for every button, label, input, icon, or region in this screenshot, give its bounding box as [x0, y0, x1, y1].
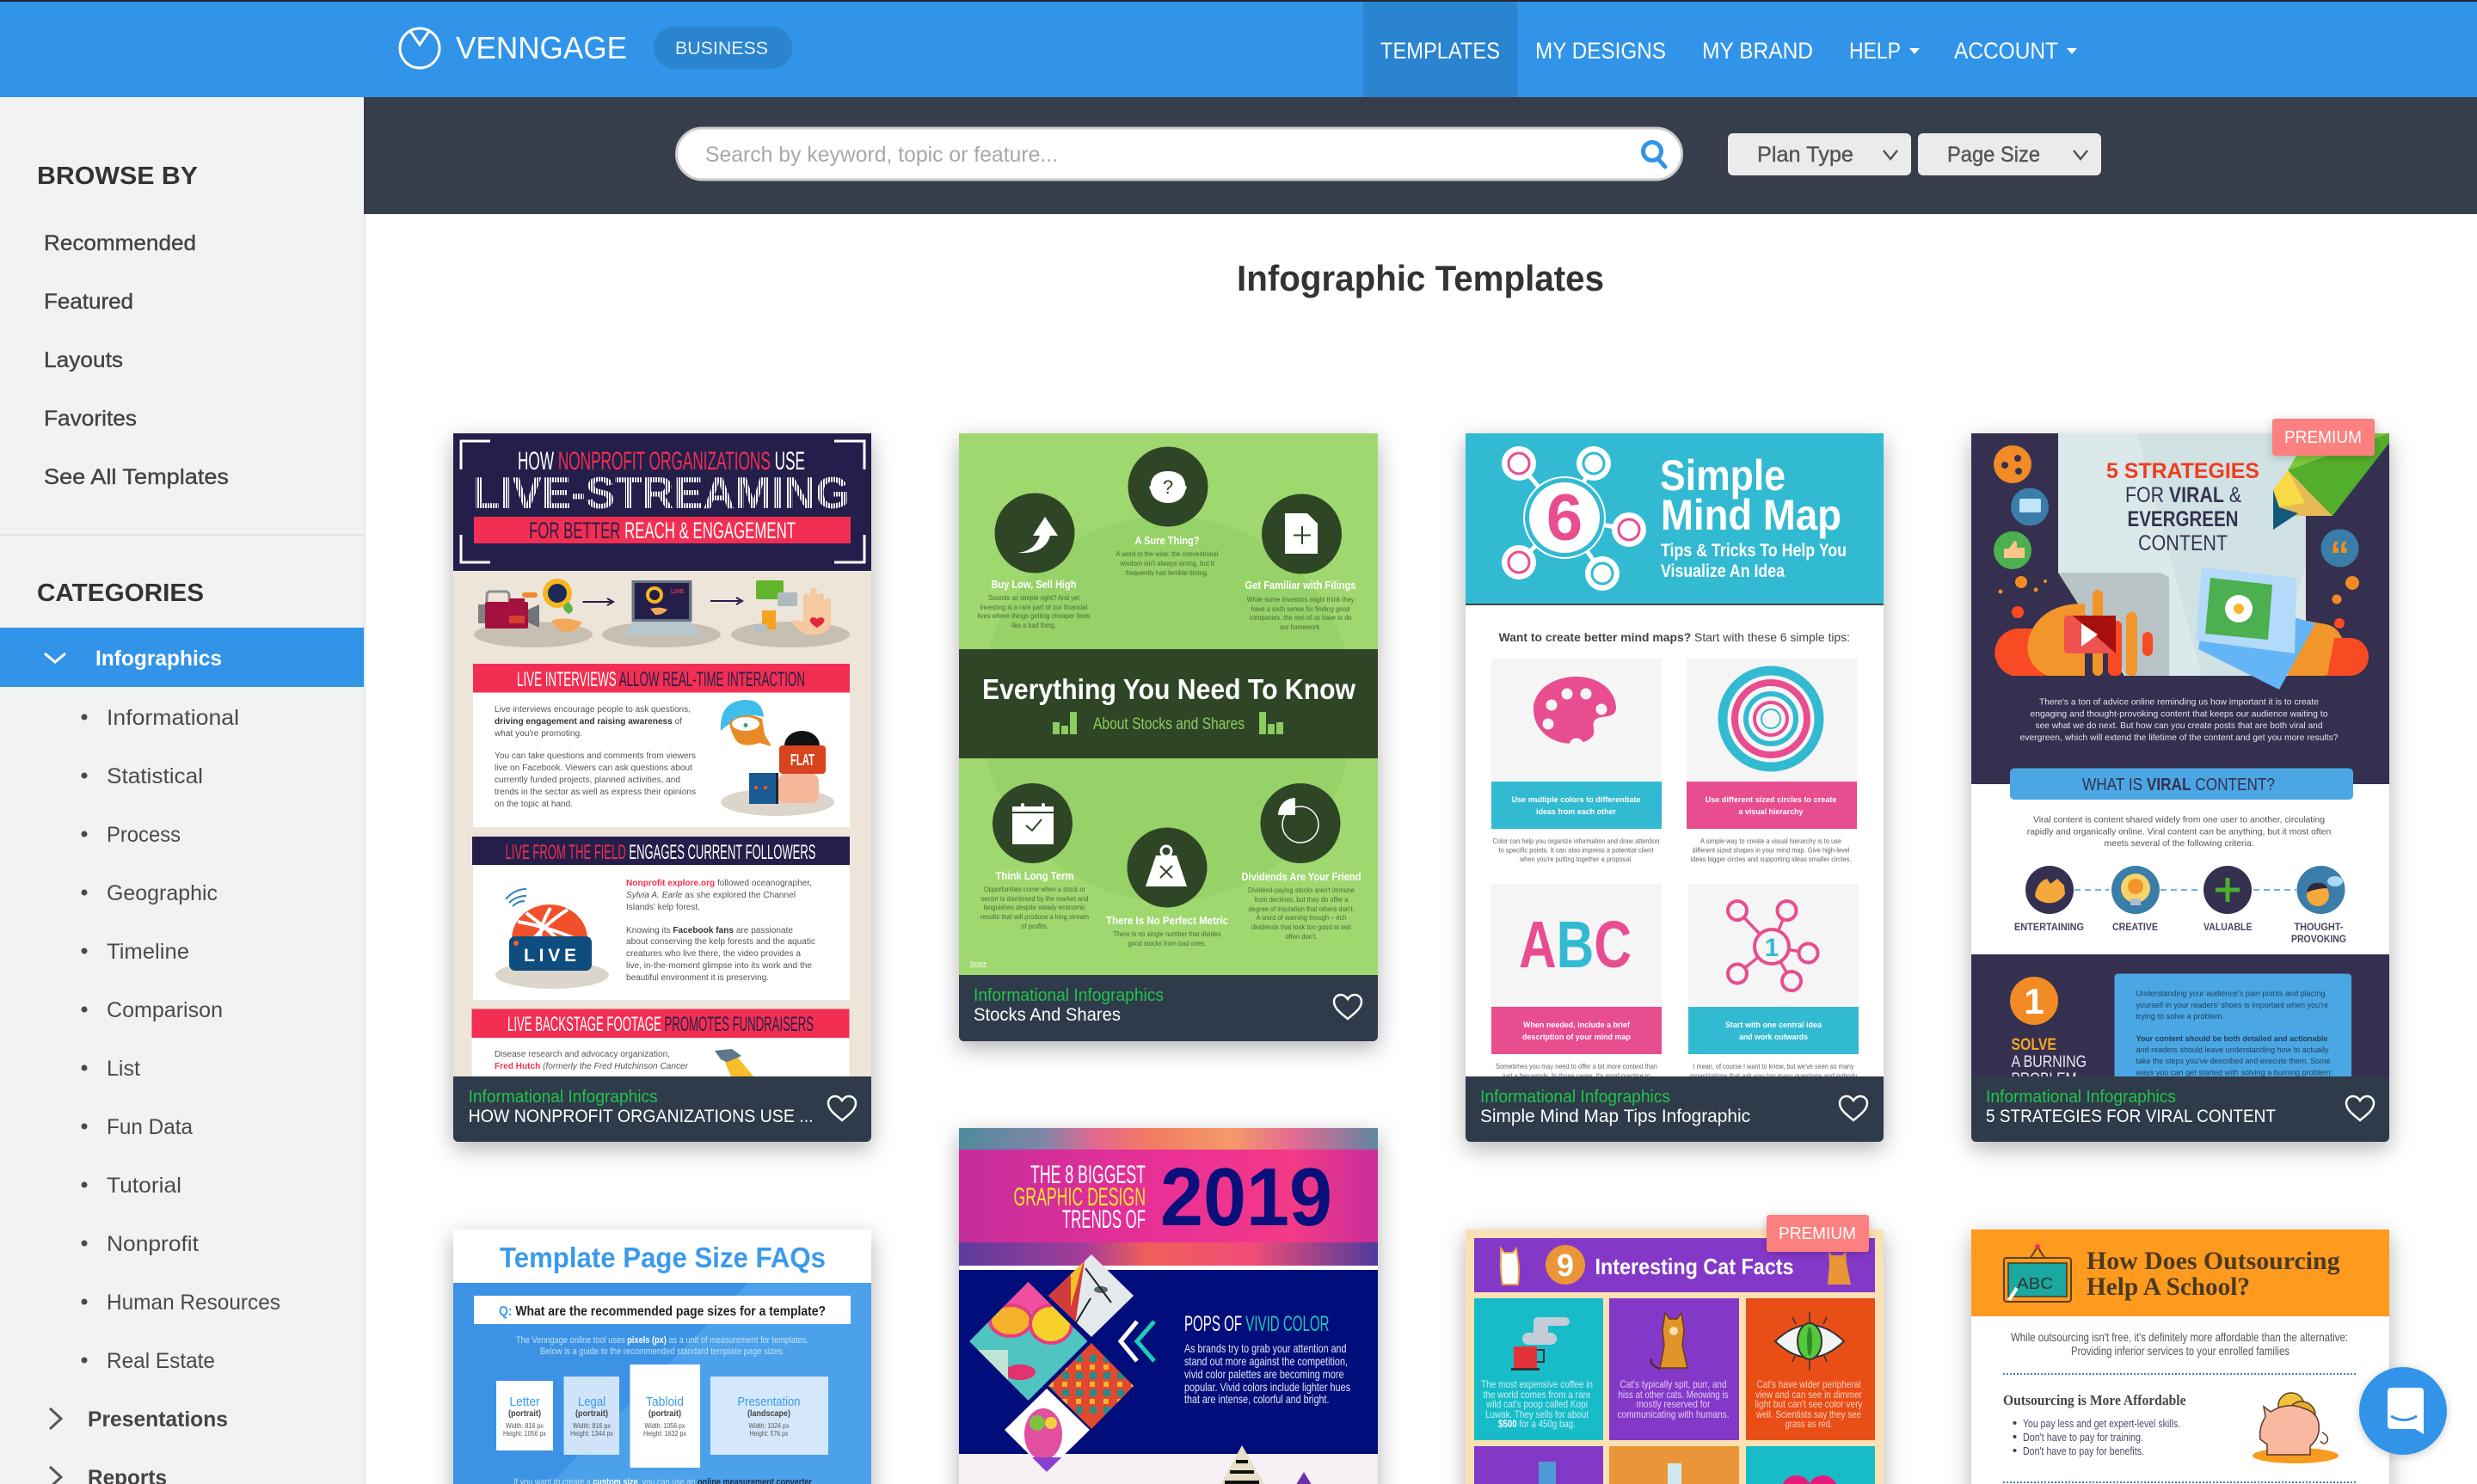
section: what is viral content: meets several of the following criteria:	[2104, 838, 2253, 849]
tip: central idea	[1688, 884, 1859, 1080]
card: simple mind map	[1466, 433, 1884, 1142]
subcategory list: Geographic	[107, 881, 218, 905]
subcategory list: Informational	[107, 706, 239, 730]
body text: creatures who live there, the video provides a	[626, 949, 801, 959]
item: a sure thing	[1116, 447, 1219, 577]
item: think long term: results that will produce a long stream	[980, 912, 1089, 921]
section: what is viral content: WHAT IS VIRAL CONTENT?	[2082, 776, 2275, 794]
footer: Stocks And Shares	[974, 1005, 1121, 1025]
pops of vivid color text: popular. Vivid colors include lighter hues	[1184, 1380, 1350, 1394]
tip: circle sizes: different sized shapes in your mind map. Give high-level	[1693, 846, 1850, 855]
tip: central idea: organizations that ask way too many questions and nobody	[1689, 1071, 1858, 1080]
browse by menu: Favorites	[44, 407, 137, 431]
tip: central idea: Start with one central idea	[1725, 1021, 1822, 1030]
body text: Nonprofit explore.org followed oceanographer,	[626, 879, 812, 888]
section: solve a burning problem: trying to solve a problem.	[2136, 1012, 2224, 1021]
item: no perfect metric	[1106, 827, 1228, 947]
item: get familiar with filings: our homework.	[1280, 622, 1321, 631]
tip: circle sizes: a visual hierarchy	[1739, 807, 1804, 817]
search band	[364, 97, 2477, 214]
fact: cat sounds: hiss at other cats. Meowing is	[1619, 1389, 1729, 1401]
header block: Mind Map	[1661, 491, 1841, 539]
intro paragraph: see what we do next. But how can you create posts that are both viral and	[2035, 721, 2323, 731]
tip: colors	[1491, 659, 1662, 863]
intro paragraph: engaging and thought-provoking content that keeps our audience waiting to	[2030, 708, 2328, 719]
header	[1971, 1230, 2389, 1316]
dropdown: plan type: Plan Type	[1757, 143, 1853, 167]
tip: colors: when you're putting together a proposal.	[1519, 855, 1632, 863]
sidebar	[0, 97, 366, 1484]
tip: circle sizes: ideas bigger circles and supporting ideas smaller circles.	[1691, 855, 1851, 863]
badge: premium: PREMIUM	[1779, 1224, 1856, 1243]
item: dividends: A word of warning though – rich	[1256, 913, 1347, 922]
section: solve a burning problem: yourself in your readers' shoes is important when you're	[2136, 1001, 2328, 1010]
item: buy low sell high: Buy Low, Sell High	[991, 578, 1077, 591]
tip: central idea: I mean, of course I want to know, but we've seen so many	[1693, 1062, 1854, 1070]
tip: central idea: and work outwards	[1739, 1033, 1808, 1042]
pops of vivid color text: stand out more against the competition,	[1184, 1354, 1348, 1368]
body text: beautiful environment it is preserving.	[626, 973, 769, 983]
header block: LIVE-STREAMING	[473, 469, 850, 518]
item: no perfect metric: There Is No Perfect Metric	[1106, 914, 1228, 927]
section: live backstage footage	[471, 1009, 850, 1081]
item: think long term: Opportunities come when a stock or	[984, 885, 1085, 893]
card: 5 strategies viral content	[1971, 419, 2389, 1142]
diamond: sunglasses mural	[969, 1282, 1088, 1401]
tip: colors: ideas from each other	[1536, 807, 1616, 817]
dropdown: page size	[1918, 133, 2101, 175]
icon: chalkboard: ABC	[2017, 1275, 2053, 1292]
item: dividends: dividends that look too good to last	[1251, 923, 1352, 931]
nav links: MY BRAND	[1702, 38, 1813, 64]
header: How Does Outsourcing	[2087, 1247, 2339, 1275]
tip: colors: Use multiple colors to differentiate	[1512, 795, 1641, 805]
header	[1474, 1238, 1875, 1292]
subcategory list: Fun Data	[107, 1115, 193, 1139]
title: Infographic Templates	[1237, 258, 1604, 298]
badge: premium	[1767, 1215, 1869, 1252]
icon: chalkboard	[2004, 1244, 2071, 1302]
subcategory list: Statistical	[107, 764, 203, 788]
illustration: camera to viewer flow: LIVE	[671, 589, 685, 595]
illustration: camera to viewer flow	[474, 579, 850, 647]
section: solve a burning problem: Understanding your audience's pain points and placing	[2136, 989, 2326, 999]
diamond: colorful cat	[1005, 1389, 1090, 1472]
header block: FOR BETTER REACH & ENGAGEMENT	[529, 518, 796, 543]
item: dividends: from declines, but they do offer a	[1254, 895, 1349, 904]
fact: cat eyes: view and can see in dimmer	[1755, 1389, 1862, 1401]
item: a sure thing: frequently has terrible timing.	[1126, 568, 1208, 577]
intro text	[516, 1335, 808, 1357]
item: think long term: Think Long Term	[996, 869, 1073, 882]
hero background shape	[2058, 433, 2306, 676]
illustration: interview microphone: FLAT	[790, 751, 814, 769]
footer: Informational Infographics	[974, 986, 1164, 1005]
social icons	[1994, 445, 2358, 578]
criteria labels: VALUABLE	[2203, 921, 2252, 933]
item: get familiar with filings: Get Familiar with Filings	[1245, 579, 1355, 592]
body text: about conserving the kelp forests and the aquatic	[626, 937, 815, 947]
browse by menu	[44, 231, 229, 489]
footer: 5 STRATEGIES FOR VIRAL CONTENT	[1986, 1107, 2276, 1126]
intro text: Providing inferior services to your enrolled families	[2071, 1344, 2290, 1358]
active category: infographics: Infographics	[95, 647, 222, 671]
size: presentation: Width: 1024 px	[748, 1421, 790, 1430]
section: solve a burning problem: and readers should leave understanding how to actually	[2136, 1046, 2329, 1055]
badge: premium	[2272, 419, 2375, 456]
section: live interviews	[473, 664, 850, 827]
icon: pencil	[2273, 426, 2389, 530]
size: presentation: (landscape)	[747, 1409, 790, 1419]
header block: HOW NONPROFIT ORGANIZATIONS USE	[518, 447, 805, 475]
fact: cat eyes: light but can't see color very	[1755, 1398, 1863, 1410]
body text: on the topic at hand.	[495, 800, 573, 809]
subcategory list: Comparison	[107, 998, 223, 1022]
body text: Islands' kelp forest.	[626, 903, 700, 912]
illustration: live globe	[495, 889, 609, 989]
size: legal: Width: 816 px	[573, 1421, 612, 1430]
section: live from the field	[472, 837, 850, 1000]
browse by menu: Layouts	[44, 348, 123, 372]
fact: coffee: wild cat's poop called Kopi	[1485, 1398, 1588, 1410]
section: solve a burning problem: Your content should be both detailed and actionable	[2136, 1034, 2327, 1044]
icon: mind map six	[1502, 446, 1646, 591]
badge: business	[654, 27, 792, 69]
header block: Visualize An Idea	[1661, 561, 1785, 581]
item: think long term: of profits.	[1021, 922, 1048, 930]
social icons: “	[2330, 533, 2350, 578]
card: outsourcing school	[1971, 1230, 2389, 1484]
lower triangles	[1208, 1445, 1313, 1484]
subcategory list	[81, 706, 280, 1373]
item: get familiar with filings: companies, the rest of us have to do	[1249, 613, 1352, 622]
tip: colors: Color can help you organize information and draw attention	[1493, 837, 1660, 845]
header banner: TRENDS OF	[1062, 1205, 1146, 1234]
section: more affordable: You pay less and get expert-level skills.	[2023, 1417, 2180, 1430]
icon: mind map six: 6	[1546, 481, 1583, 555]
header banner: 2019	[1160, 1151, 1332, 1243]
section: more affordable: Don't have to pay for benefits.	[2023, 1444, 2144, 1457]
header block	[453, 433, 871, 571]
size: presentation	[710, 1377, 828, 1455]
dropdown: page size: Page Size	[1947, 143, 2040, 167]
diamond: triangle pattern	[1048, 1343, 1134, 1429]
footer	[453, 1076, 871, 1142]
intro paragraph: There's a ton of advice online reminding us how important it is to create	[2039, 696, 2319, 707]
fact: coffee: The most expensive coffee in	[1481, 1378, 1593, 1390]
item: a sure thing: A word to the wise: the conventional	[1116, 549, 1219, 558]
section: solve a burning problem	[2010, 973, 2351, 1088]
footer	[959, 975, 1378, 1041]
tip: colors: to specific points. It can also impress a potential client	[1498, 846, 1654, 855]
size: letter: Width: 816 px	[506, 1421, 544, 1430]
criteria labels	[2014, 921, 2346, 945]
header block: Simple	[1660, 451, 1786, 500]
item: dividends: Dividends Are Your Friend	[1242, 870, 1361, 883]
fact: cat sounds	[1609, 1298, 1739, 1440]
body text: live on Facebook. Viewers can ask questions about	[495, 763, 692, 773]
item: buy low sell high	[977, 494, 1091, 629]
subcategory list: Timeline	[107, 940, 189, 964]
illustration: interview microphone	[721, 700, 834, 816]
card: cat facts	[1466, 1215, 1884, 1484]
body text: Live interviews encourage people to ask questions,	[495, 705, 691, 714]
heading: browse by: BROWSE BY	[37, 163, 198, 190]
intro paragraph	[2019, 696, 2339, 743]
search box: Search by keyword, topic or feature...	[705, 143, 1058, 167]
footer	[1971, 1076, 2389, 1142]
size: letter: (portrait)	[508, 1409, 541, 1419]
collapsed categories	[50, 1407, 228, 1484]
item: a sure thing: ?	[1163, 476, 1173, 498]
tip: abc descriptions: When needed, include a brief	[1523, 1021, 1631, 1030]
chat bubble button	[2359, 1367, 2447, 1455]
card: nonprofit live-streaming	[453, 433, 871, 1142]
body text: currently funded projects, planned activities, and	[495, 776, 680, 785]
size: letter: Height: 1056 px	[503, 1429, 547, 1438]
header block	[1466, 433, 1884, 605]
source link: Source	[970, 961, 986, 967]
section: live backstage footage: Fred Hutch (formerly the Fred Hutchinson Cancer	[495, 1062, 689, 1071]
section: solve a burning problem: take the steps you've described and execute them. Some	[2136, 1057, 2331, 1066]
header banner: THE 8 BIGGEST	[1030, 1161, 1146, 1189]
item: a sure thing: wisdom isn't always wrong, but it	[1120, 559, 1214, 567]
fact: coffee: the world comes from a rare	[1483, 1389, 1591, 1401]
title text: 5 STRATEGIES	[2106, 459, 2259, 483]
tip: abc descriptions: just a few words. In those cases, it's good practice to	[1502, 1071, 1650, 1080]
title text: CONTENT	[2138, 531, 2228, 555]
tip: circle sizes: A simple way to create a visual hierarchy is to use	[1700, 837, 1841, 845]
item: dividends: often don't.	[1285, 932, 1318, 941]
item: buy low sell high: investing is a rare part of our financial	[980, 603, 1088, 611]
tip: abc descriptions: Sometimes you may need to offer a bit more context than	[1496, 1062, 1657, 1070]
body text: driving engagement and raising awareness of	[495, 717, 682, 727]
criteria icons	[2025, 866, 2345, 914]
item: no perfect metric: good stocks from bad ones.	[1128, 939, 1206, 947]
size: tabloid: (portrait)	[648, 1409, 681, 1419]
title text: FOR VIRAL &	[2125, 483, 2241, 507]
fact: cat eyes: grass as red.	[1786, 1418, 1832, 1430]
section: what is viral content: rapidly and organically online. Viral content can be anything, but it most often	[2027, 827, 2331, 837]
intro text: Below is a guide to the recommended standard template page sizes.	[540, 1346, 784, 1357]
size: legal: Height: 1344 px	[570, 1429, 614, 1438]
fact: cat sounds: mostly reserved for	[1636, 1398, 1711, 1410]
body text: trends in the sector as well as express their opinions	[495, 788, 696, 797]
fact: cat eyes	[1746, 1298, 1875, 1440]
pops of vivid color text: that are intense, colorful and bright.	[1184, 1392, 1330, 1406]
body text: live, in-the-moment glimpse into its work and the	[626, 961, 812, 971]
intro text: The Venngage online tool uses pixels (px) as a unit of measurement for templates.	[516, 1335, 808, 1346]
intro text	[2011, 1330, 2348, 1358]
browse by menu: Recommended	[44, 231, 196, 255]
item: dividends: degree of insulation that others don't.	[1249, 905, 1354, 913]
fact: coffee	[1474, 1298, 1603, 1440]
browse by menu: See All Templates	[44, 465, 229, 489]
fact: cat eyes: Cat's have wider peripheral	[1756, 1378, 1861, 1390]
pops of vivid color text: vivid color palettes are becoming more	[1184, 1367, 1344, 1381]
title text: EVERGREEN	[2128, 507, 2238, 531]
criteria labels: CREATIVE	[2112, 921, 2158, 933]
section: what is viral content	[1971, 769, 2389, 954]
item: think long term	[980, 783, 1089, 930]
section: live backstage footage: Disease research and advocacy organization,	[495, 1050, 670, 1059]
item: get familiar with filings: While some investors might think they	[1247, 595, 1355, 604]
size: legal: (portrait)	[575, 1409, 608, 1419]
pops of vivid color text: As brands try to grab your attention and	[1184, 1341, 1347, 1355]
nav links: MY DESIGNS	[1535, 38, 1666, 64]
search box	[676, 128, 1682, 180]
item: a sure thing: A Sure Thing?	[1135, 534, 1200, 547]
pops of vivid color text	[1184, 1312, 1350, 1406]
nav links: ACCOUNT	[1954, 38, 2058, 64]
intro text: While outsourcing isn't free, it's definitely more affordable than the alternative:	[2011, 1330, 2348, 1344]
tip: abc descriptions	[1491, 884, 1662, 1080]
body text: You can take questions and comments from viewers	[495, 751, 696, 761]
illustration: piggy bank	[2253, 1393, 2339, 1463]
item: think long term: languishes despite steady economic	[984, 903, 1086, 911]
footer: Informational Infographics	[1480, 1088, 1670, 1107]
illustration: live globe: LIVE	[524, 946, 576, 966]
icon: search	[1643, 143, 1665, 167]
title band: Everything You Need To Know	[982, 673, 1355, 705]
header: Help A School?	[2087, 1272, 2250, 1301]
body text: what you're promoting.	[494, 729, 582, 739]
title text	[2106, 459, 2259, 555]
diamond: portrait	[1048, 1254, 1134, 1337]
icon: venngage logo	[400, 28, 439, 68]
question box: Q: What are the recommended page sizes for a template?	[499, 1304, 826, 1319]
item: buy low sell high: Sounds so simple right? And yet	[988, 593, 1080, 602]
subcategory list: Real Estate	[107, 1349, 215, 1373]
header banner	[959, 1128, 1378, 1266]
tip: circle sizes	[1687, 659, 1857, 863]
size: letter	[496, 1381, 553, 1450]
section: more affordable: Don't have to pay for training.	[2023, 1431, 2143, 1444]
collapsed categories: Presentations	[88, 1407, 228, 1432]
header: 9	[1557, 1248, 1574, 1283]
title band	[959, 649, 1378, 758]
section: solve a burning problem: PROBLEM	[2011, 1070, 2076, 1088]
footer	[1466, 1076, 1884, 1142]
footer: HOW NONPROFIT ORGANIZATIONS USE ...	[469, 1107, 814, 1126]
subcategory list: Process	[107, 823, 181, 847]
size: legal: Legal	[578, 1395, 605, 1409]
body text: Knowing its Facebook fans are passionate	[626, 926, 793, 935]
item: dividends: Dividend-paying stocks aren't immune	[1248, 886, 1355, 894]
section: live from the field: LIVE FROM THE FIELD ENGAGES CURRENT FOLLOWERS	[506, 841, 815, 864]
size: legal	[564, 1377, 619, 1455]
footer: Informational Infographics	[1986, 1088, 2176, 1107]
footer: Simple Mind Map Tips Infographic	[1480, 1107, 1750, 1126]
pops of vivid color text: POPS OF VIVID COLOR	[1184, 1312, 1330, 1336]
active category: infographics	[0, 628, 364, 687]
section: what is viral content: Viral content is content shared widely from one user to another, circulating	[2033, 815, 2325, 825]
item: think long term: sector is dismissed by the market and	[980, 894, 1089, 903]
intro paragraph: evergreen, which will extend the lifetime of the content and get you more results?	[2019, 733, 2339, 743]
title band: About Stocks and Shares	[1093, 715, 1245, 733]
tip: abc descriptions: description of your mind map	[1522, 1033, 1631, 1042]
tip: abc descriptions: ABC	[1519, 908, 1632, 982]
section: solve a burning problem: 1	[2024, 981, 2044, 1021]
criteria labels: ENTERTAINING	[2014, 921, 2084, 933]
question box	[474, 1296, 851, 1324]
size: tabloid: Tabloid	[646, 1395, 684, 1409]
header banner: GRAPHIC DESIGN	[1013, 1183, 1146, 1211]
item: no perfect metric: There is no single number that divides	[1113, 929, 1221, 938]
item: dividends	[1242, 783, 1361, 941]
size: tabloid	[630, 1364, 700, 1468]
tip: central idea: 1	[1765, 934, 1779, 962]
body text	[626, 879, 815, 983]
section: live backstage footage: LIVE BACKSTAGE FOOTAGE PROMOTES FUNDRAISERS	[507, 1013, 814, 1036]
second row of facts	[1474, 1446, 1875, 1484]
top navigation bar	[0, 0, 2477, 97]
subcategory list: List	[107, 1057, 140, 1081]
heading: categories: CATEGORIES	[37, 579, 204, 607]
card: stocks and shares	[959, 433, 1378, 1041]
size: letter: Letter	[509, 1395, 540, 1409]
footer: Informational Infographics	[469, 1088, 658, 1107]
section: solve a burning problem: SOLVE	[2011, 1036, 2056, 1054]
fact: cat sounds: communicating with humans.	[1617, 1408, 1729, 1420]
icon: double chevron	[1121, 1321, 1154, 1361]
size: tabloid: Width: 1056 px	[645, 1421, 685, 1430]
header: Interesting Cat Facts	[1595, 1254, 1794, 1279]
fact: coffee: $500 for a 450g bag.	[1498, 1418, 1576, 1430]
body text	[494, 705, 696, 809]
brand name: VENNGAGE	[456, 30, 627, 65]
header: Template Page Size FAQs	[500, 1242, 826, 1273]
illustration: clouds and media	[1995, 567, 2369, 690]
subcategory list: Tutorial	[107, 1174, 181, 1198]
subcategory list: Human Resources	[107, 1291, 280, 1315]
badge: business: BUSINESS	[675, 39, 768, 58]
subcategory list: Nonprofit	[107, 1232, 199, 1256]
card: graphic design trends 2019	[959, 1128, 1378, 1484]
section: solve a burning problem: A BURNING	[2011, 1053, 2087, 1071]
header	[453, 1230, 871, 1283]
fact: cat eyes: well. Scientists say they see	[1755, 1408, 1861, 1420]
body text: Sylvia A. Earle as she explored the Channel	[626, 891, 796, 900]
section: live interviews: LIVE INTERVIEWS ALLOW REAL-TIME INTERACTION	[517, 668, 805, 691]
tip: circle sizes: Use different sized circles to create	[1705, 795, 1837, 805]
nav links: TEMPLATES	[1380, 38, 1500, 64]
browse by menu: Featured	[44, 290, 133, 314]
dropdown: plan type	[1728, 133, 1911, 175]
item: get familiar with filings: have a sixth sense for finding good	[1251, 604, 1350, 613]
item: buy low sell high: lives where things getting cheaper feels	[977, 611, 1091, 620]
section: more affordable	[2003, 1392, 2186, 1457]
item: get familiar with filings	[1245, 494, 1355, 631]
criteria labels: PROVOKING	[2291, 933, 2346, 945]
criteria labels: THOUGHT-	[2295, 921, 2343, 933]
size: presentation: Height: 576 px	[750, 1429, 789, 1438]
intro line: Want to create better mind maps? Start with these 6 simple tips:	[1498, 630, 1850, 644]
nav links: HELP	[1849, 38, 1901, 64]
card: template page size faqs	[453, 1230, 871, 1484]
section: solve a burning problem: ways you can get started with solving a burning problem:	[2136, 1068, 2333, 1078]
header block: Tips & Tricks To Help You	[1661, 541, 1847, 561]
fact: cat sounds: Cat's typically spit, purr, and	[1620, 1378, 1727, 1390]
section: more affordable: Outsourcing is More Affordable	[2003, 1392, 2186, 1408]
item: buy low sell high: like a bad thing.	[1011, 621, 1056, 629]
size: tabloid: Height: 1632 px	[643, 1429, 687, 1438]
size: presentation: Presentation	[738, 1395, 800, 1409]
nav links	[1380, 38, 2077, 64]
fact: coffee: Luwak. They sells for about	[1485, 1408, 1589, 1420]
badge: premium: PREMIUM	[2284, 428, 2362, 447]
